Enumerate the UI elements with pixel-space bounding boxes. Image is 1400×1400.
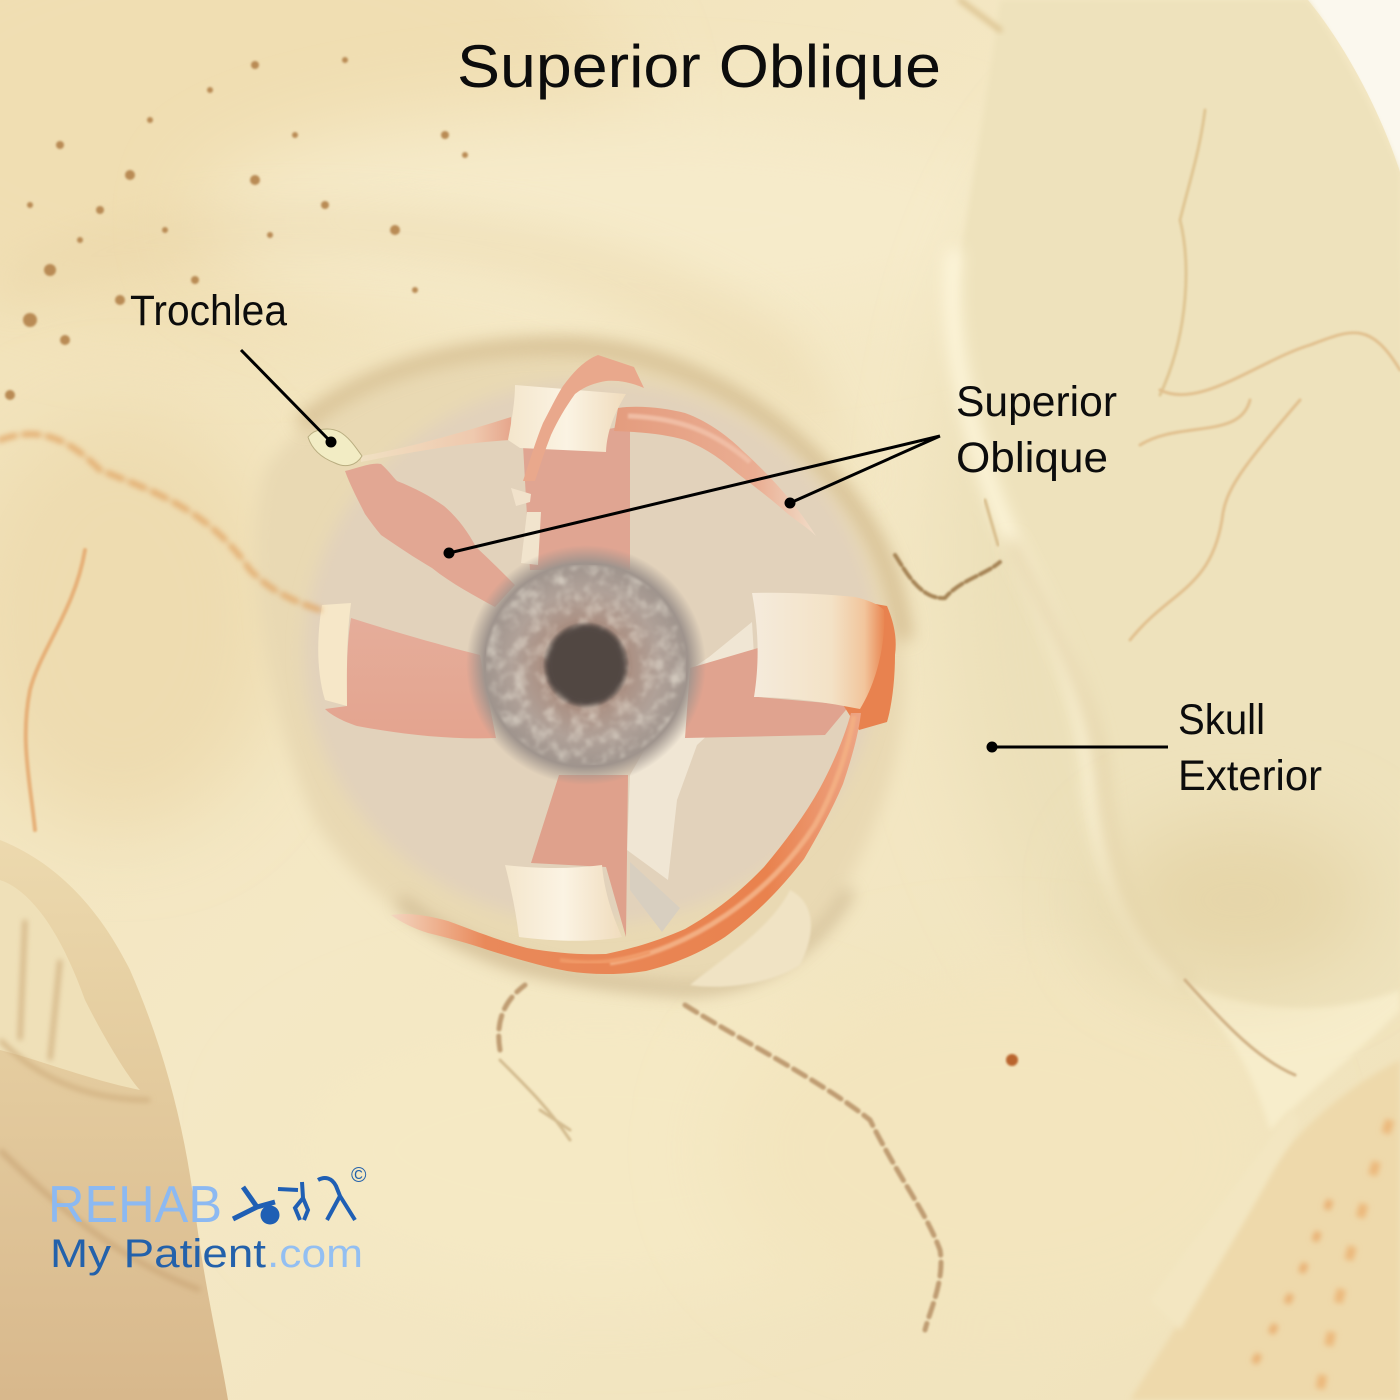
orbital bone shard xyxy=(627,622,756,880)
label: Skull Exterior: Skull xyxy=(1178,696,1265,744)
iris and pupil xyxy=(466,545,706,785)
forehead pores xyxy=(5,57,468,400)
logo: Rehab My Patient: © xyxy=(351,1164,367,1187)
medial rectus tendon xyxy=(318,603,351,706)
inferior rectus tendon xyxy=(505,865,622,941)
logo: Rehab My Patient: .com xyxy=(267,1232,363,1276)
background corner xyxy=(1308,0,1400,172)
lateral rectus muscle xyxy=(685,648,850,738)
levator muscle slip xyxy=(511,355,644,565)
lateral rectus tendon xyxy=(752,593,896,730)
trochlea xyxy=(308,429,362,466)
inferior rectus muscle xyxy=(531,775,628,937)
label: Trochlea: Trochlea xyxy=(130,287,287,335)
temple and cheek contour xyxy=(952,0,1400,1130)
label: Superior Oblique: Oblique xyxy=(956,434,1108,482)
nasal cavity xyxy=(0,840,228,1400)
label: Trochlea xyxy=(130,287,336,448)
label: Superior Oblique: Superior xyxy=(956,378,1117,426)
superior oblique muscle belly xyxy=(345,464,515,607)
translucent eyeball xyxy=(304,380,880,924)
superior rectus tendon xyxy=(508,385,626,452)
title: Superior Oblique xyxy=(457,33,941,100)
logo: Rehab My Patient xyxy=(48,1164,367,1276)
medial rectus muscle xyxy=(325,618,496,738)
label: Skull Exterior: Exterior xyxy=(1178,752,1322,800)
lower right zygomatic side xyxy=(1130,1060,1400,1400)
eye orbit socket xyxy=(255,345,905,990)
label: Skull Exterior xyxy=(986,696,1322,800)
label: Superior Oblique xyxy=(444,378,1117,558)
logo: Rehab My Patient: My Patient xyxy=(50,1232,266,1276)
lower wedge xyxy=(630,862,680,932)
superior oblique tendon sweep xyxy=(361,407,816,536)
logo: Rehab My Patient: REHAB xyxy=(48,1176,222,1234)
inferior oblique muscle xyxy=(391,713,861,974)
superior rectus muscle xyxy=(523,425,630,570)
